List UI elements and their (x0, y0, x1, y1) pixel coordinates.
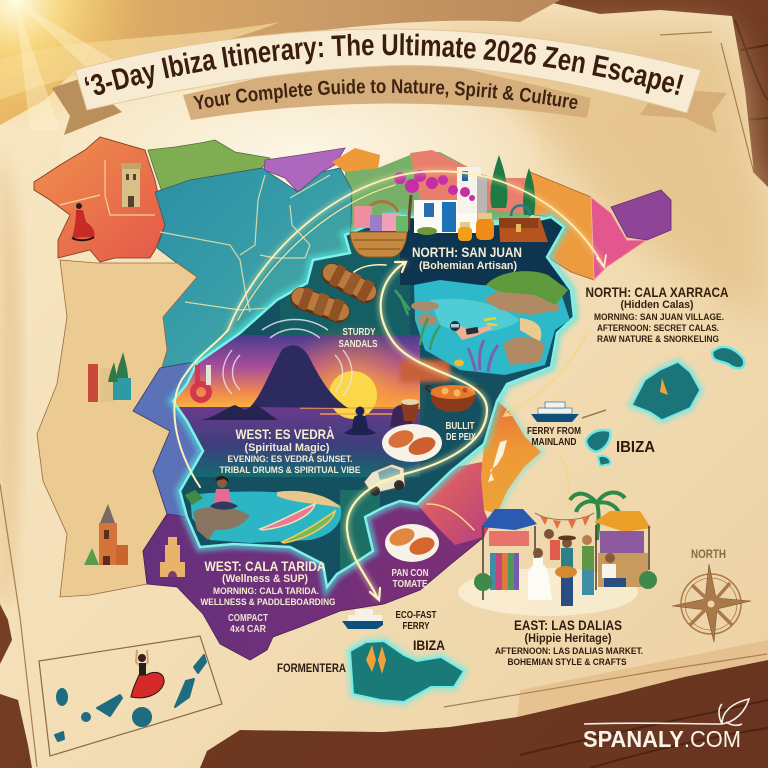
label: East Las Dalias (495, 617, 643, 668)
label: East Las Dalias: EAST: LAS DALIAS (514, 617, 622, 633)
label: sturdy sandals: SANDALS (338, 339, 378, 350)
label: bullit de peix (446, 421, 476, 443)
label: West Es Vedra: (Spiritual Magic) (244, 442, 330, 454)
icon: Las Dalias hippie market (458, 493, 657, 616)
label: Ibiza small: IBIZA (616, 439, 655, 456)
label: eco-fast ferry: ECO-FAST (396, 610, 436, 621)
subtitle band (183, 50, 591, 120)
label: North San Juan: (Bohemian Artisan) (419, 260, 517, 272)
arrow: sandals to house (354, 265, 386, 272)
icon: sturdy sandals (287, 258, 381, 326)
label: North San Juan: NORTH: SAN JUAN (412, 244, 522, 260)
label: sturdy sandals: STURDY (342, 327, 376, 338)
map: Catalonia purple region (611, 190, 671, 240)
label: West Es Vedra: TRIBAL DRUMS & SPIRITUAL VIBE (220, 465, 360, 476)
market palm (570, 493, 625, 540)
label: compact 4x4 car (228, 613, 268, 635)
arrow: main inset route (347, 262, 487, 600)
label: compact 4x4 car: 4x4 CAR (230, 624, 267, 635)
icon: Canary flamenco dancer (131, 650, 164, 698)
map: purple Cantabria region (264, 148, 345, 192)
icon: tribal drum (401, 399, 419, 421)
label: Ibiza bottom: IBIZA (413, 637, 445, 653)
paddleboard 2 (282, 511, 335, 543)
arrow: large northern arc (228, 171, 606, 330)
label: sturdy sandals (338, 327, 378, 350)
title ribbon (52, 28, 727, 135)
map: Valencia orange region (481, 401, 541, 514)
icon: Es Vedra sunset scene (193, 320, 420, 420)
label: West Cala Tarida: (Wellness & SUP) (222, 573, 308, 585)
icon: whitewashed house with bougainvillea (394, 155, 535, 235)
subtitle text: Your Complete Guide to Nature, Spirit & Culture (193, 79, 578, 110)
top parchment curl with sun glow (0, 0, 560, 130)
icon: west lagoon with SUP boards (185, 490, 341, 543)
icon: north lagoon (395, 271, 570, 375)
label: North San Juan (412, 244, 522, 272)
label: West Es Vedra (220, 426, 360, 476)
icon: yoga woman (210, 476, 238, 510)
label: East Las Dalias: (Hippie Heritage) (524, 633, 612, 645)
label: West Cala Tarida: WELLNESS & PADDLEBOARDING (200, 597, 336, 608)
map: Galicia region (34, 137, 165, 262)
icon: small Ibiza island (586, 430, 610, 466)
icon: snorkeler (450, 318, 497, 366)
icon: bottom Ibiza island (350, 641, 464, 702)
icon: Galicia flamenco dancer (72, 203, 95, 240)
panel: Canary Islands inset (39, 636, 222, 756)
label: West Cala Tarida: WEST: CALA TARIDA (204, 558, 326, 574)
label: pan con tomate: TOMATE (392, 578, 428, 590)
sunset sky (170, 335, 420, 407)
label: compass north: NORTH (691, 547, 726, 561)
label: East Las Dalias: AFTERNOON: LAS DALIAS MARKET. (495, 646, 643, 657)
label: ferry from mainland: FERRY FROM (527, 426, 581, 437)
label: North Cala Xarraca: (Hidden Calas) (620, 299, 694, 311)
market musicians (528, 529, 626, 606)
label: North Cala Xarraca: AFTERNOON: SECRET CALAS. (597, 323, 719, 334)
label: North Cala Xarraca (586, 284, 728, 345)
icon: ferry from mainland (531, 402, 606, 422)
icon: plate of pan con tomate (385, 524, 439, 562)
map: Andalusia purple region (143, 500, 484, 660)
icon: compact 4x4 car (364, 464, 405, 496)
label: West Cala Tarida (200, 558, 336, 608)
map: Aragon orange region (530, 172, 594, 280)
icon: Andalusia castle (160, 537, 185, 577)
label: North Cala Xarraca: RAW NATURE & SNORKELING (597, 334, 719, 345)
icon: Galicia tower (121, 163, 141, 207)
map: orange Basque region (332, 148, 380, 172)
label: West Es Vedra: EVENING: ES VEDRÀ SUNSET. (228, 454, 352, 465)
map: green Asturias region (148, 140, 270, 192)
label: pan con tomate (392, 567, 428, 590)
logo: Spanaly (583, 699, 749, 752)
route arrows (174, 171, 606, 600)
label: West Es Vedra: WEST: ES VEDRÀ (236, 426, 334, 442)
label: ferry from mainland (527, 426, 581, 448)
map: Extremadura blue region (133, 360, 205, 517)
icon: Canary islands (55, 655, 206, 741)
icon: eco-fast ferry (342, 609, 383, 629)
arrow: ferry to Las Dalias (427, 457, 569, 530)
text: spanaly.com: SPANALY.COM (583, 726, 741, 752)
label: eco-fast ferry: FERRY (402, 621, 430, 632)
label: pan con tomate: PAN CON (392, 567, 428, 579)
orange stall (594, 511, 651, 590)
label: North Cala Xarraca: NORTH: CALA XARRACA (586, 284, 728, 300)
banner (75, 29, 701, 113)
arrow: to Cala Tarida (174, 330, 228, 487)
label: bullit de peix: BULLIT (446, 421, 474, 432)
label: Formentera: FORMENTERA (277, 663, 346, 675)
arrow: to mainland ferry (504, 333, 587, 416)
map: Catalonia pink region (591, 197, 647, 280)
title text: ‘3-Day Ibiza Itinerary: The Ultimate 2026 Zen Escape! (84, 33, 684, 96)
label: West Cala Tarida: MORNING: CALA TARIDA. (213, 586, 319, 597)
label: North Cala Xarraca: MORNING: SAN JUAN VILLAGE. (594, 312, 724, 323)
panel: central glowing inset (170, 210, 580, 610)
label: bullit de peix: DE PEIX (446, 432, 476, 443)
icon: meditating silhouette (344, 405, 412, 435)
icon: northern Portugal buildings (88, 352, 131, 402)
icon: birds over coast (488, 440, 507, 482)
ribbon tails (52, 78, 122, 135)
sunset sea (170, 407, 420, 477)
paddleboard 1 (260, 504, 315, 530)
label: ferry from mainland: MAINLAND (532, 437, 576, 448)
label: eco-fast ferry (396, 610, 436, 632)
icon: Mallorca island (632, 362, 700, 420)
blue stall (481, 509, 537, 600)
icon: leaf (584, 699, 749, 725)
icon: compass rose (672, 564, 751, 642)
icon: leather bag (499, 206, 548, 242)
icon: plate of tomato bread (382, 424, 442, 462)
map: central teal region (155, 168, 352, 368)
map: Murcia coral region (417, 462, 490, 545)
map: upper green and coral regions (345, 152, 530, 235)
label: compact 4x4 car: COMPACT (228, 613, 268, 624)
icon: Portugal castle (84, 504, 128, 565)
icon: honey jars (458, 213, 494, 241)
label: East Las Dalias: BOHEMIAN STYLE & CRAFTS (508, 657, 626, 668)
map: province border lines (60, 160, 330, 312)
icon: bullit de peix pot (426, 385, 480, 412)
icon: woven basket (350, 202, 408, 257)
map: Portugal region (37, 260, 197, 597)
icon: Menorca island (712, 347, 744, 368)
